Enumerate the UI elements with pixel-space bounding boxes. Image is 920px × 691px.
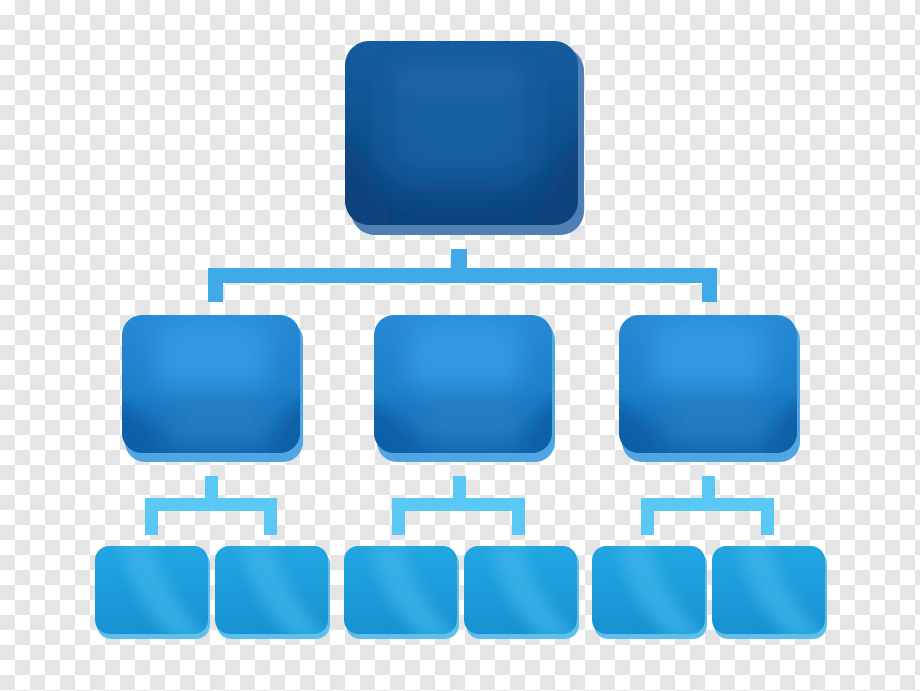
connector: middle box 1 to bottom boxes: [145, 476, 277, 535]
top level box: [335, 41, 590, 235]
middle box 1: [112, 315, 310, 463]
bottom box 1: [95, 540, 210, 640]
connector: middle box 2 to bottom boxes: [392, 476, 525, 535]
bottom box 6: [712, 540, 827, 640]
connector: middle box 3 to bottom boxes: [641, 476, 774, 535]
middle box 3: [609, 315, 807, 463]
middle box 2: [364, 315, 562, 463]
bottom box 3: [344, 540, 459, 640]
bottom box 4: [464, 540, 579, 640]
bottom box 5: [592, 540, 707, 640]
bottom box 2: [215, 540, 330, 640]
connector: top level to middle level: [208, 249, 717, 302]
